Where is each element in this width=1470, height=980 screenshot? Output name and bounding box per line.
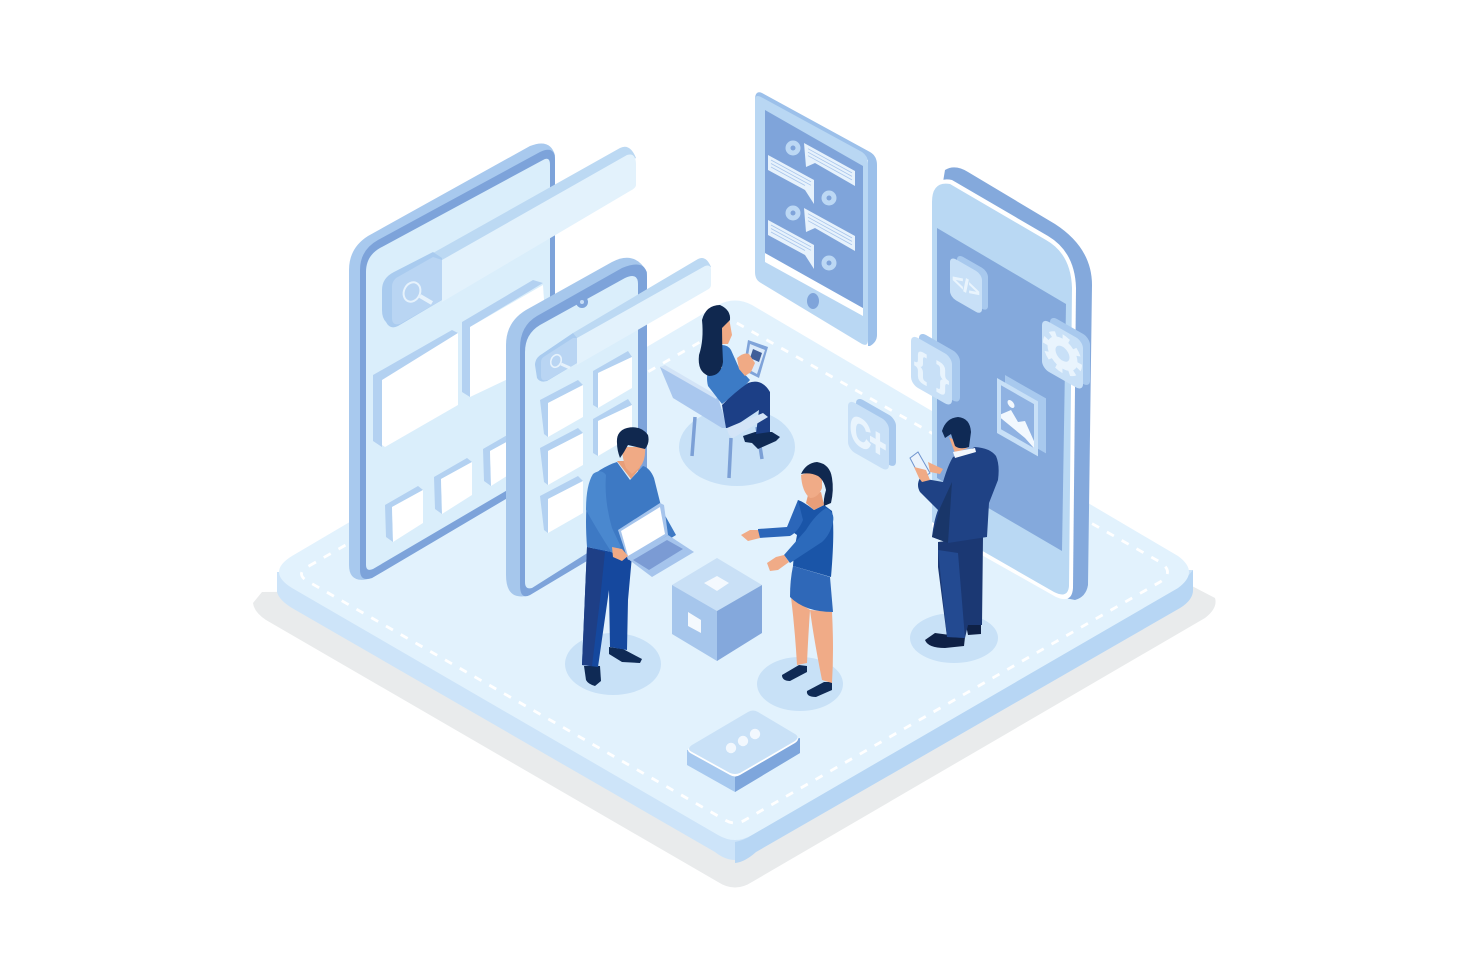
- large phone right: [932, 167, 1092, 600]
- face: [801, 472, 822, 498]
- hands: [914, 462, 943, 482]
- seat: [727, 413, 768, 438]
- icon: magnifier: [401, 280, 432, 304]
- dress top: [790, 500, 833, 577]
- hands: [612, 547, 628, 561]
- chair legs: [692, 417, 762, 478]
- phone screen: [937, 228, 1066, 551]
- tablet device: [743, 340, 768, 378]
- laptop: [618, 503, 694, 577]
- man with laptop: [582, 427, 694, 686]
- arm front: [758, 500, 803, 538]
- small card 2: [434, 458, 472, 514]
- trousers: [582, 547, 632, 667]
- tablet screen: [746, 344, 765, 374]
- phone device: [910, 452, 930, 479]
- sweater: [586, 462, 676, 556]
- chair back edge: [660, 365, 718, 399]
- chat bubble 2: [768, 155, 814, 204]
- app card row 1 right: [593, 351, 632, 408]
- small card 3: [483, 430, 521, 486]
- small wireframe phone: [506, 258, 647, 596]
- shoes: [925, 633, 965, 648]
- man in suit: [910, 417, 999, 648]
- cube box: [672, 558, 762, 661]
- large wireframe phone: [349, 143, 555, 580]
- collar: [953, 448, 976, 458]
- arm back: [784, 508, 833, 563]
- chat bubble 3: [804, 208, 855, 251]
- sticker side: [688, 612, 701, 633]
- trousers: [938, 537, 983, 638]
- small search bar: [535, 258, 711, 382]
- tablet keys: [750, 349, 762, 362]
- app card row 2 right: [593, 399, 632, 456]
- skirt: [790, 566, 833, 612]
- C++ tile: [848, 392, 896, 476]
- face: [721, 318, 732, 344]
- small card 1: [385, 486, 423, 542]
- floor circle: seated woman: [679, 408, 795, 486]
- chat tablet: [755, 92, 877, 346]
- floor circle: man with laptop: [565, 633, 661, 695]
- search button: [382, 252, 442, 327]
- legs: [791, 597, 833, 683]
- platform shadow: [253, 585, 1216, 888]
- dots: [726, 729, 760, 753]
- seated woman with tablet: [660, 305, 780, 478]
- trousers highlight: [938, 550, 965, 638]
- floor circle: standing woman: [757, 657, 843, 711]
- app card row 3 left: [540, 476, 583, 533]
- large card left: [373, 330, 458, 447]
- platform: [277, 300, 1193, 863]
- torso: [707, 345, 750, 404]
- tablet home strip: [765, 253, 863, 316]
- chat bubble 1: [804, 143, 855, 186]
- hands: [737, 354, 755, 376]
- neck: [617, 461, 640, 479]
- code tile: </>: [952, 268, 980, 305]
- braces tile: [911, 326, 960, 412]
- shoes: [743, 432, 780, 449]
- standing woman: [741, 462, 833, 697]
- jacket: [918, 447, 999, 543]
- dashed inner outline: [302, 322, 1168, 823]
- sticker top: [704, 576, 729, 591]
- arm: [586, 471, 621, 553]
- code tile: [950, 250, 988, 319]
- C++ tile: C+: [850, 405, 885, 469]
- shoes: [782, 665, 807, 681]
- large card right: [462, 280, 548, 397]
- hair: [699, 305, 730, 376]
- hands: [741, 530, 760, 541]
- hair: [942, 417, 971, 448]
- neck: [806, 492, 824, 510]
- tablet screen: [765, 110, 863, 308]
- hair: [801, 462, 833, 506]
- large search bar: [382, 147, 636, 327]
- app card row 2 left: [540, 428, 583, 485]
- search button: [535, 333, 577, 382]
- avatars: [786, 140, 836, 270]
- trousers: [722, 382, 770, 434]
- notch: [576, 296, 588, 308]
- icon: gear: [1046, 327, 1080, 380]
- face: [622, 447, 645, 474]
- home button: [807, 293, 819, 309]
- trousers shade: [582, 547, 605, 666]
- neck: [949, 437, 968, 453]
- chat bubble 4: [768, 220, 814, 269]
- app card row 1 left: [540, 380, 583, 437]
- icon: magnifier: [549, 353, 570, 369]
- three-dot button: [687, 710, 800, 792]
- gear tile: [1042, 310, 1090, 395]
- shoes: [584, 666, 601, 686]
- jacket shade: [932, 482, 952, 543]
- braces tile: { }: [914, 342, 949, 399]
- floor circle: man in suit: [910, 613, 998, 663]
- chair back: [660, 366, 727, 428]
- image tile: [997, 370, 1046, 461]
- hair: [617, 427, 649, 458]
